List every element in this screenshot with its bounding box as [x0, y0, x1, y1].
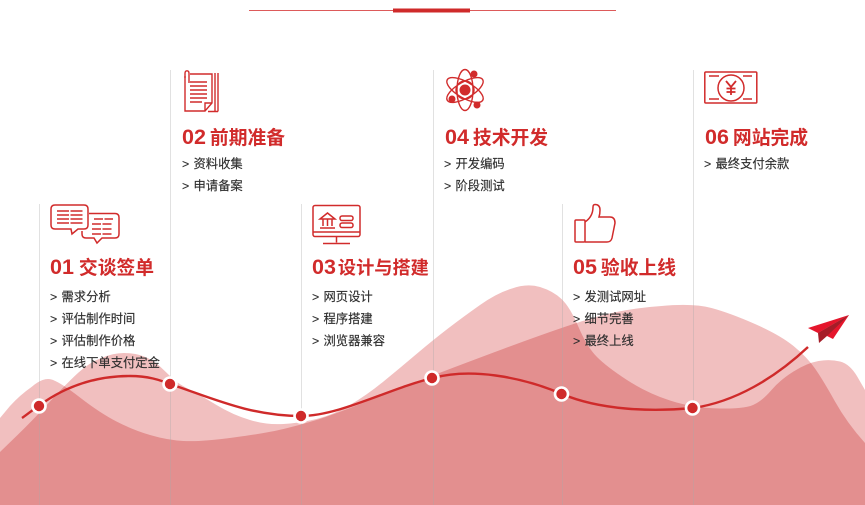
list: >: [573, 334, 580, 348]
icon: thumbs up: [574, 204, 616, 243]
list: [312, 290, 385, 348]
icon: monitor with bank: [312, 204, 361, 244]
node 6: [685, 400, 700, 416]
step 04: [444, 68, 548, 193]
list: >: [312, 312, 319, 326]
list: 最终上线: [584, 334, 634, 348]
list: 程序搭建: [324, 312, 373, 326]
list: >: [50, 312, 57, 326]
node 1: [31, 398, 47, 414]
icon: document with clip: [184, 70, 219, 112]
list: 评估制作时间: [62, 312, 135, 326]
list: 申请备案: [194, 179, 243, 193]
heading: 01 交谈签单: [50, 255, 154, 279]
list: >: [573, 290, 580, 304]
list: 开发编码: [456, 157, 505, 171]
icon: chat bubbles: [50, 204, 120, 244]
list: >: [573, 312, 580, 326]
list: 评估制作价格: [62, 334, 135, 348]
list: >: [704, 157, 711, 171]
heading: 03设计与搭建: [312, 255, 429, 279]
icon: yuan banknote: [704, 71, 758, 104]
heading: 06网站完成: [705, 125, 808, 149]
list: 浏览器兼容: [324, 334, 385, 348]
list: [182, 157, 243, 193]
list: >: [50, 290, 57, 304]
node 3: [293, 408, 309, 424]
list: 网页设计: [324, 290, 373, 304]
step 05: [573, 204, 676, 348]
list: >: [312, 290, 319, 304]
list: 在线下单支付定金: [62, 356, 160, 370]
step 02: [182, 70, 285, 193]
list: >: [50, 334, 57, 348]
list: [444, 157, 505, 193]
heading: 04技术开发: [445, 125, 548, 149]
list: >: [182, 157, 189, 171]
heading: 02前期准备: [182, 125, 285, 149]
list: >: [444, 179, 451, 193]
list: [50, 290, 160, 370]
list: 阶段测试: [456, 179, 505, 193]
step 06: [704, 71, 808, 171]
list: 需求分析: [62, 290, 111, 304]
list: >: [50, 356, 57, 370]
step 01: [50, 204, 160, 370]
list: >: [444, 157, 451, 171]
node 4: [424, 370, 440, 386]
node 2: [162, 376, 178, 392]
node 5: [554, 386, 569, 402]
list: [573, 290, 646, 348]
icon: atom: [446, 68, 484, 112]
list: 资料收集: [194, 157, 243, 171]
list: >: [312, 334, 319, 348]
list: 发测试网址: [584, 290, 646, 304]
list: 最终支付余款: [716, 157, 789, 171]
list: >: [182, 179, 189, 193]
top rule: [249, 8, 616, 12]
step 03: [312, 204, 429, 348]
heading: 05验收上线: [573, 255, 676, 279]
list: 细节完善: [584, 312, 634, 326]
